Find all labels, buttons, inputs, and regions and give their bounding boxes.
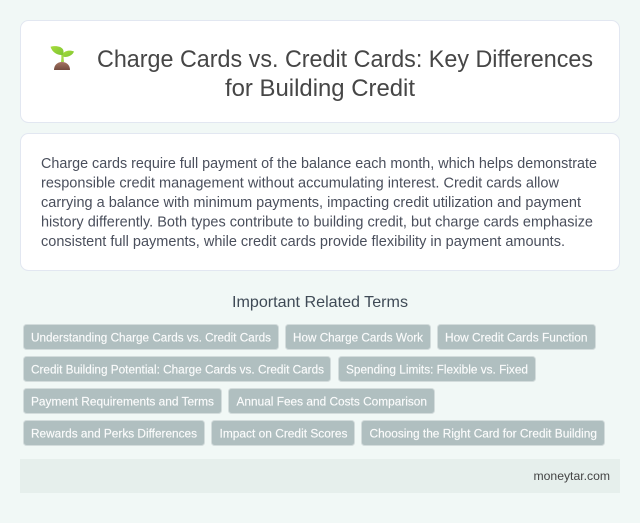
tag: spending limits: Spending Limits: Flexible vs. Fixed bbox=[346, 362, 528, 376]
panel: title card bbox=[20, 20, 620, 122]
tag: spending limits bbox=[338, 356, 536, 382]
tag: credit building potential: Credit Building Potential: Charge Cards vs. Credit Cards bbox=[31, 362, 324, 376]
tag: choosing the right card bbox=[362, 420, 604, 446]
tag: payment requirements: Payment Requirements and Terms bbox=[31, 394, 214, 408]
title: for Building Credit bbox=[225, 75, 415, 102]
tag list: related terms bbox=[24, 324, 604, 446]
text block: summary bbox=[41, 156, 597, 250]
tag: impact on credit scores bbox=[212, 420, 354, 446]
title bbox=[97, 46, 593, 102]
icon: seedling bbox=[50, 46, 74, 70]
tag: how credit cards function bbox=[438, 324, 596, 350]
tag: understanding bbox=[24, 324, 278, 350]
text block: summary: history differently. Both types contribute to building credit, but charge cards emphasize bbox=[41, 214, 593, 230]
title: Charge Cards vs. Credit Cards: Key Differences bbox=[97, 46, 593, 73]
tag: how charge cards work bbox=[286, 324, 430, 350]
tag: annual fees bbox=[228, 388, 434, 414]
footer bar bbox=[20, 459, 620, 493]
text block: summary: carrying a balance with minimum payments, impacting credit utilization and payment bbox=[41, 195, 581, 211]
footer text: site name: moneytar.com bbox=[534, 469, 610, 483]
tag: rewards and perks: Rewards and Perks Differences bbox=[31, 426, 197, 440]
heading: important related terms: Important Related Terms bbox=[232, 294, 408, 311]
panel: summary text card bbox=[20, 134, 620, 270]
tag: how charge cards work: How Charge Cards Work bbox=[293, 330, 424, 344]
text block: summary: consistent full payments, while credit cards provide flexibility in payment amounts. bbox=[41, 234, 565, 250]
tag: payment requirements bbox=[24, 388, 222, 414]
tag: rewards and perks bbox=[24, 420, 204, 446]
tag: credit building potential bbox=[24, 356, 330, 382]
tag: annual fees: Annual Fees and Costs Comparison bbox=[236, 394, 427, 408]
text block: summary: Charge cards require full payment of the balance each month, which helps demonstrate bbox=[41, 156, 597, 172]
tag: choosing the right card: Choosing the Right Card for Credit Building bbox=[370, 426, 597, 440]
tag: impact on credit scores: Impact on Credit Scores bbox=[220, 426, 348, 440]
tag: how credit cards function: How Credit Cards Function bbox=[445, 330, 588, 344]
tag: understanding: Understanding Charge Cards vs. Credit Cards bbox=[31, 330, 271, 344]
text block: summary: responsible credit management without accumulating interest. Credit cards allow bbox=[41, 176, 559, 192]
